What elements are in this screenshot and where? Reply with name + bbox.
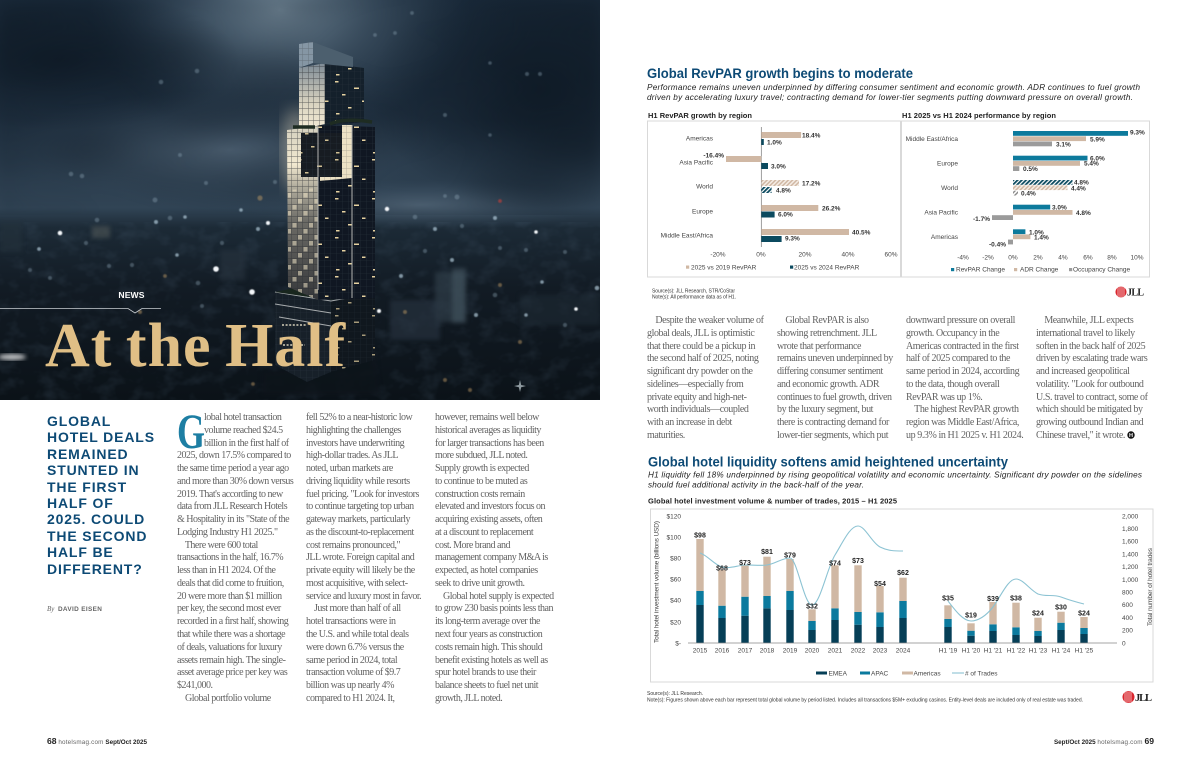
region labels: Americas	[686, 136, 714, 142]
value labels: 1.4%	[1034, 234, 1049, 241]
bar totals: $19	[965, 613, 977, 620]
chart: H1 RevPAR growth by region: H1 RevPAR growth by region	[648, 111, 752, 120]
value labels: 9.3%	[1130, 129, 1145, 136]
axis labels: 8%	[1107, 254, 1117, 262]
main title: At the Half	[45, 312, 346, 380]
legend: 2025 vs 2019 RevPAR	[691, 264, 757, 272]
legend: ADR Change	[1020, 266, 1059, 274]
x axis labels: 2015	[693, 648, 708, 654]
subheading: liquidity	[648, 470, 1142, 490]
axis labels: 2%	[1033, 254, 1043, 262]
right axis labels: 800	[1122, 590, 1133, 596]
bar totals: $62	[897, 570, 909, 577]
value labels: 0.4%	[1021, 190, 1036, 197]
upper lit corner	[320, 125, 352, 181]
end mark	[1127, 431, 1135, 439]
x axis labels: 2017	[738, 648, 753, 654]
legend	[816, 670, 998, 678]
hero photo: night city skyline with glowing tower	[0, 0, 600, 400]
x axis labels: 2024	[896, 648, 911, 654]
x axis labels: 2022	[851, 648, 866, 654]
right axis labels: 0	[1122, 640, 1126, 647]
bars	[992, 131, 1128, 244]
article column 6 on right page: downward pressure on overall growth. Occupancy in the Americas contracted in the first half of 2025 compared to the same period in 2024, according to the data, though overall RevPAR was up 1%. The highest RevPAR growth region was Middle East/Africa, up 9.3% in H1 2025 v. H1 2024.	[906, 315, 1023, 441]
article column 1: lobal hotel transaction volume reached $24.5 billion in the first half of 2025, down 17.5% compared to the same time period a year ago and more than 30% down versus 2019. That's according to new data from JLL Research Hotels & Hospitality in its "State of the Lodging Industry H1 2025." There were 600 total transactions in the half, 16.7% less than in H1 2024. Of the deals that did come to fruition, 20 were more than $1 million per key, the second most ever recorded in a first half, showing that while there was a shortage of deals, valuations for luxury assets remain high. The single- asset average price per key was $241,000. Global portfolio volume	[177, 412, 293, 704]
subheading: RevPAR	[647, 83, 1140, 102]
bokeh lights	[28, 11, 599, 392]
heading: RevPAR: Global RevPAR growth begins to moderate	[647, 66, 913, 81]
x axis labels: H1 '24	[1052, 648, 1071, 654]
chart: global hotel investment volume and trades	[648, 496, 1154, 682]
crown section	[299, 63, 325, 130]
bar totals: $32	[806, 603, 818, 610]
right axis labels: 600	[1122, 602, 1133, 609]
axis labels	[710, 252, 898, 258]
chart: H1 RevPAR growth by region	[648, 111, 900, 277]
skyscraper tower	[262, 42, 380, 395]
article column 7 on right page: Meanwhile, JLL expects international travel to likely soften in the back half of 2025 driven by escalating trade wars and increased geopolitical volatility. "Look for outbound U.S. travel to contract, some of which should be mitigated by growing outbound Indian and Chinese travel," it wrote.	[1036, 315, 1148, 441]
bar totals: $30	[1055, 605, 1067, 612]
deck headline: GLOBAL HOTEL DEALS REMAINED STUNTED IN THE FIRST HALF OF 2025. COULD THE SECOND HALF BE DIFFERENT?	[47, 413, 155, 577]
right axis labels: 1,600	[1122, 539, 1139, 546]
bar totals: $74	[829, 560, 841, 567]
axis labels: 4%	[1058, 254, 1068, 262]
value labels: 3.0%	[771, 163, 786, 170]
logo: JLL bottom: JLL	[1135, 693, 1152, 704]
value labels: 1.0%	[1029, 229, 1044, 236]
right axis labels: 2,000	[1122, 513, 1139, 520]
value labels: 4.8%	[776, 187, 791, 194]
value labels	[703, 132, 871, 242]
region labels: Middle East/Africa	[906, 136, 958, 143]
legend: 2025 vs 2024 RevPAR	[794, 264, 860, 272]
value labels: 3.0%	[1052, 204, 1067, 211]
logo: JLL bottom	[1122, 691, 1152, 704]
chart: H1 2025 vs H1 2024 performance by region	[902, 111, 1150, 277]
article column 2: fell 52% to a near-historic low highlighting the challenges investors have underwriting high-dollar trades. As JLL noted, urban markets are driving liquidity while resorts fuel pricing. "Look for investors to continue targeting top urban gateway markets, particularly as the discount-to-replacement cost remains pronounced," JLL wrote. Foreign capital and private equity will likely be the most acquisitive, with select- service and luxury most in favor. Just more than half of all hotel transactions were in the U.S. and while total deals were down 6.7% versus the same period in 2024, total transaction volume of $9.7 billion was up nearly 4% compared to H1 2024. It,	[306, 412, 421, 704]
x axis labels: 2019	[783, 648, 798, 654]
x axis labels: 2021	[828, 648, 843, 654]
bar totals: $73	[739, 560, 751, 567]
axis labels: 60%	[884, 252, 898, 258]
folio right: Sept/Oct 2025 hotelsmag.com 69	[1054, 736, 1154, 746]
x axis labels: H1 '25	[1075, 648, 1094, 654]
chart: H1 2025 vs H1 2024 performance by region: H1 2025 vs H1 2024 performance by region	[902, 111, 1056, 120]
logo: JLL top	[1116, 286, 1144, 298]
value labels: 40.5%	[852, 229, 871, 236]
heading: liquidity	[648, 454, 1142, 490]
subheading: liquidity: H1 liquidity fell 18% underpinned by rising geopolitical volatility and economic uncertainty. Significant dry powder on the sidelines	[648, 470, 1142, 480]
source note: RevPAR charts: Note(s): All performance data as of H1.	[652, 294, 736, 300]
middle shaft right face	[318, 125, 375, 300]
left axis labels: $40	[670, 597, 681, 604]
axis labels: 20%	[798, 252, 812, 258]
heading: RevPAR	[647, 66, 1140, 102]
EMEA bars	[696, 605, 1088, 643]
value labels	[973, 129, 1145, 248]
region labels	[906, 136, 959, 241]
value labels: -0.4%	[989, 241, 1006, 248]
region labels: Americas	[931, 234, 959, 241]
right axis labels: 200	[1122, 628, 1133, 635]
region labels: World	[941, 185, 958, 192]
subheading: RevPAR: driven by accelerating luxury travel; contracting demand for lower-tier segments putting downward pressure on overall growth.	[647, 93, 1133, 102]
value labels: 3.1%	[1056, 141, 1071, 148]
article column 5 on right page: Global RevPAR is also showing retrenchment. JLL wrote that performance remains uneven underpinned by differing consumer sentiment and economic growth. ADR continues to fuel growth, driven by the luxury segment, but there is contracting demand for lower-tier segments, which put	[777, 315, 893, 441]
right axis labels: 1,200	[1122, 564, 1139, 571]
source note: RevPAR charts	[652, 288, 736, 300]
value labels: 17.2%	[802, 180, 821, 187]
value labels: 18.4%	[802, 132, 821, 139]
value labels: -1.7%	[973, 216, 990, 223]
x axis labels: 2020	[805, 648, 820, 654]
logo: JLL top: JLL	[1127, 288, 1144, 298]
value labels: 6.0%	[1090, 155, 1105, 162]
x axis labels: 2018	[760, 648, 775, 654]
drop cap: G	[177, 403, 205, 459]
value labels: 5.4%	[1084, 160, 1099, 167]
bars	[726, 132, 849, 242]
region labels	[661, 136, 714, 240]
legend	[686, 264, 860, 272]
region labels: World	[696, 184, 713, 190]
folio left: 68 hotelsmag.com Sept/Oct 2025	[47, 736, 147, 746]
axis labels: -4%	[957, 254, 969, 262]
subheading: liquidity: should fuel additional activity in the back-half of the year.	[648, 480, 864, 490]
axis labels: -20%	[710, 252, 726, 258]
source note: liquidity chart	[647, 691, 1083, 704]
legend: APAC	[871, 670, 889, 678]
roof gardens	[293, 120, 372, 127]
x axis labels: H1 '20	[962, 648, 981, 654]
bar totals: $24	[1078, 610, 1090, 617]
section label: NEWS: NEWS	[118, 290, 145, 300]
x axis labels: 2016	[715, 648, 730, 654]
region labels: Europe	[692, 208, 713, 216]
legend: EMEA	[828, 670, 848, 678]
right axis labels	[1122, 513, 1139, 647]
value labels: 5.9%	[1090, 136, 1105, 143]
x axis labels: H1 '22	[1007, 648, 1026, 654]
left axis labels: $-	[675, 640, 681, 647]
end mark: H	[1129, 433, 1133, 439]
bar totals: $54	[874, 581, 886, 588]
bar totals: $35	[942, 595, 954, 602]
left axis labels: $80	[670, 555, 681, 562]
Americas bars	[696, 539, 1088, 631]
axis labels: 0%	[1008, 254, 1018, 262]
bar totals: $98	[694, 532, 706, 539]
x axis labels: H1 '19	[939, 648, 958, 654]
podium	[275, 292, 331, 382]
left axis labels: $60	[670, 576, 681, 583]
middle shaft left face	[287, 126, 318, 300]
legend: Americas	[914, 670, 941, 678]
value labels: 0.5%	[1023, 166, 1038, 173]
bar totals: $38	[1010, 595, 1022, 602]
source note: liquidity chart: Source(s): JLL Research.	[647, 691, 703, 697]
value labels: -16.4%	[703, 152, 724, 159]
source note: RevPAR charts: Source(s): JLL Research, STR/CoStar	[652, 288, 735, 294]
axis labels: 10%	[1130, 254, 1144, 262]
value labels: 4.4%	[1071, 185, 1086, 192]
source note: liquidity chart: Note(s): Figures shown above each bar represent total global volume by period listed. Includes all transactions $5M+ excluding casinos. Entity-level deals are included only of real estate was traded.	[647, 698, 1083, 704]
bar totals: $79	[784, 553, 796, 560]
trades line, first half	[948, 579, 1084, 621]
tower halo	[282, 108, 310, 192]
left axis labels: $20	[670, 619, 681, 626]
legend: RevPAR Change	[956, 266, 1005, 274]
value labels: 4.8%	[1074, 179, 1089, 186]
region labels: Asia Pacific	[924, 210, 959, 216]
x axis labels: 2023	[873, 648, 888, 654]
legend: # of Trades	[965, 670, 998, 678]
heading: liquidity: Global hotel liquidity softens amid heightened uncertainty	[648, 454, 1008, 470]
legend: Occupancy Change	[1073, 266, 1130, 274]
left axis labels: $100	[667, 534, 681, 541]
left axis title: Total hotel investment volume (billions USD)	[654, 521, 660, 643]
tower base shadow	[262, 350, 380, 395]
chart: global hotel investment volume and trades: Global hotel investment volume & number of trades, 2015 – H1 2025	[648, 496, 897, 506]
bar totals: $81	[761, 549, 773, 556]
value labels: 9.3%	[785, 235, 800, 242]
value labels: 6.0%	[778, 211, 793, 218]
right axis title: Total number of hotel trades	[1147, 547, 1154, 626]
news rule with notch	[0, 308, 161, 314]
bar totals: $73	[852, 558, 864, 565]
value labels: 1.0%	[767, 139, 782, 146]
bar totals	[694, 532, 1090, 620]
x axis labels: H1 '21	[984, 648, 1003, 654]
axis labels: 40%	[841, 252, 855, 258]
right axis labels: 1,800	[1122, 526, 1139, 533]
legend	[951, 266, 1130, 274]
article column 3: however, remains well below historical averages as liquidity for larger transactions has been more subdued, JLL noted. Supply growth is expected to continue to be muted as construction costs remain elevated and investors focus on acquiring existing assets, often at a discount to replacement cost. More brand and management company M&A is expected, as hotel companies seek to drive unit growth. Global hotel supply is expected to grow 230 basis points less than its long-term average over the next four years as construction costs remain high. This should benefit existing hotels as well as spur hotel brands to use their balance sheets to fuel net unit growth, JLL noted.	[435, 412, 554, 704]
left axis labels: $120	[667, 513, 681, 520]
article column 4 on right page: Despite the weaker volume of global deals, JLL is optimistic that there could be a pickup in the second half of 2025, noting significant dry powder on the sidelines—especially from private equity and high-net- worth individuals—coupled with an increase in debt maturities.	[647, 315, 764, 441]
bar totals: $24	[1032, 610, 1044, 617]
bar totals: $39	[987, 596, 999, 603]
x axis labels: H1 '23	[1029, 648, 1048, 654]
region labels: Asia Pacific	[679, 160, 714, 166]
axis labels: -2%	[982, 254, 994, 262]
axis labels	[957, 254, 1144, 262]
APAC bars	[696, 591, 1088, 636]
right axis labels: 400	[1122, 615, 1133, 622]
recess	[301, 133, 342, 177]
value labels: 4.8%	[1076, 210, 1091, 217]
axis labels: 0%	[756, 252, 766, 258]
blurred buildings	[0, 222, 600, 340]
byline: By DAVID EISEN	[47, 605, 102, 613]
right axis labels: 1,000	[1122, 577, 1139, 584]
left axis labels	[667, 513, 681, 647]
value labels: 26.2%	[822, 205, 841, 212]
bar totals: $68	[716, 566, 728, 573]
sparkle	[514, 380, 526, 392]
roof box	[299, 42, 313, 68]
region labels: Europe	[937, 160, 958, 168]
region labels: Middle East/Africa	[661, 232, 713, 240]
subheading: RevPAR: Performance remains uneven underpinned by differing consumer sentiment and economic growth. ADR continues to fuel growth	[647, 83, 1140, 92]
x axis labels	[693, 648, 1094, 654]
right axis labels: 1,400	[1122, 551, 1139, 558]
axis labels: 6%	[1083, 254, 1093, 262]
trades line, annual	[700, 526, 903, 605]
